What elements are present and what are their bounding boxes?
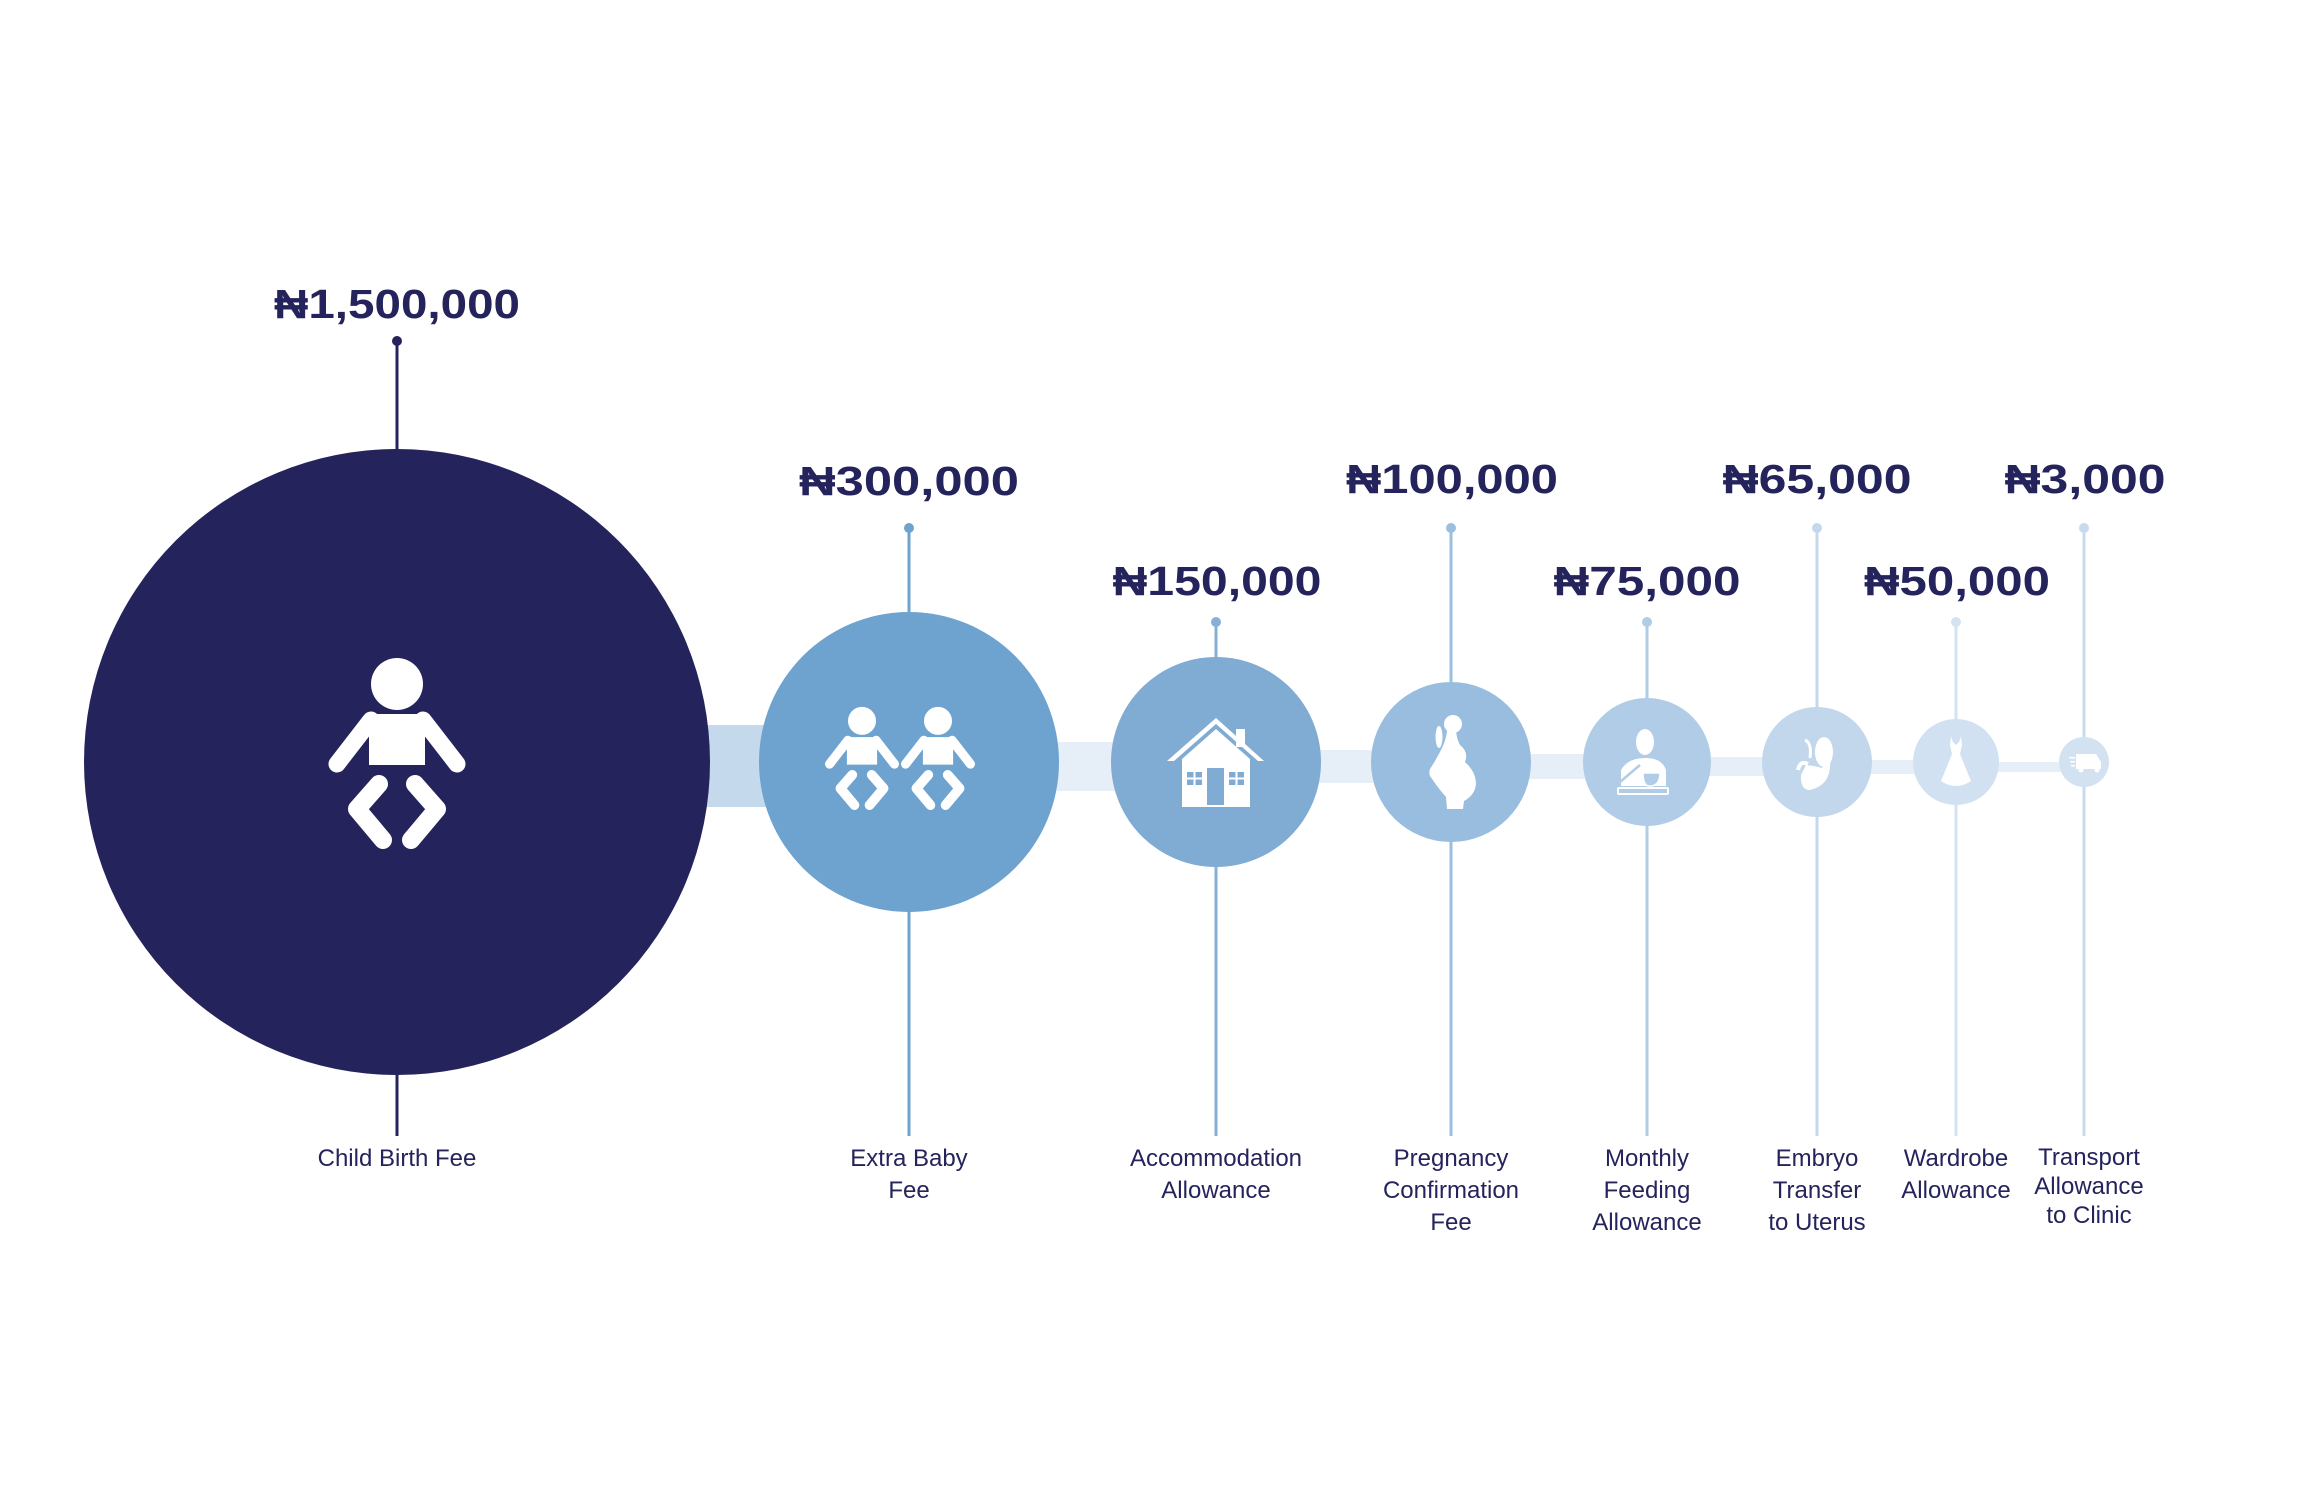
amount: 150,000: ₦150,000: [1112, 558, 1322, 604]
item: Embryo Transfer to Uterus: [1722, 456, 1912, 1236]
amount: 1,500,000: ₦1,500,000: [274, 281, 520, 327]
label: Pregnancy Confirmation Fee: Pregnancy: [1394, 1145, 1508, 1172]
label: Pregnancy Confirmation Fee: Fee: [1430, 1209, 1472, 1236]
item: Extra Baby Fee: [759, 458, 1059, 1204]
label: Embryo Transfer to Uterus: Transfer: [1773, 1177, 1861, 1204]
label: Monthly Feeding Allowance: Allowance: [1592, 1209, 1702, 1236]
label: Monthly Feeding Allowance: Feeding: [1604, 1177, 1690, 1204]
item: Pregnancy Confirmation Fee: [1346, 456, 1558, 1236]
icon: van: [2069, 754, 2101, 772]
label: Child Birth Fee: Child Birth Fee: [318, 1145, 476, 1172]
circle: embryo: [1762, 707, 1872, 817]
label: Transport Allowance to Clinic: to Clinic: [2046, 1202, 2132, 1229]
circle: pregnancy: [1371, 682, 1531, 842]
item: Accommodation Allowance: [1111, 558, 1322, 1204]
label: Wardrobe Allowance: Allowance: [1901, 1177, 2011, 1204]
circle: wardrobe: [1913, 719, 1999, 805]
amount: 50,000: ₦50,000: [1864, 558, 2050, 604]
icon: house: [1167, 718, 1264, 807]
amount: 300,000: ₦300,000: [799, 458, 1019, 504]
label: Accommodation Allowance: Accommodation: [1130, 1145, 1302, 1172]
item: Transport Allowance to Clinic: [2004, 456, 2166, 1229]
label: Accommodation Allowance: Allowance: [1161, 1177, 1271, 1204]
connector bands: [700, 725, 2070, 807]
item: Wardrobe Allowance: [1864, 558, 2050, 1204]
item: Monthly Feeding Allowance: [1554, 558, 1740, 1236]
label: Pregnancy Confirmation Fee: Confirmation: [1383, 1177, 1519, 1204]
icon: dress: [1941, 737, 1971, 786]
label: Transport Allowance to Clinic: Transport: [2038, 1144, 2140, 1171]
icon: baby: [337, 658, 457, 840]
circle: feeding: [1583, 698, 1711, 826]
label: Transport Allowance to Clinic: Allowance: [2034, 1173, 2144, 1200]
label: Embryo Transfer to Uterus: to Uterus: [1768, 1209, 1866, 1236]
amount: 100,000: ₦100,000: [1346, 456, 1558, 502]
circle: accommodation: [1111, 657, 1321, 867]
icon: twin babies: [830, 707, 970, 805]
amount: 3,000: ₦3,000: [2004, 456, 2166, 502]
icon: feeding: [1617, 729, 1669, 795]
label: Monthly Feeding Allowance: Monthly: [1605, 1145, 1689, 1172]
icon: embryo: [1798, 737, 1833, 790]
circle: extra baby: [759, 612, 1059, 912]
amount: 75,000: ₦75,000: [1554, 558, 1740, 604]
amount: 65,000: ₦65,000: [1722, 456, 1912, 502]
label: Extra Baby Fee: Fee: [888, 1177, 930, 1204]
circle: transport: [2059, 737, 2109, 787]
label: Embryo Transfer to Uterus: Embryo: [1776, 1145, 1858, 1172]
item: Child Birth Fee: [84, 281, 710, 1172]
circle: child birth: [84, 449, 710, 1075]
icon: pregnant woman: [1429, 715, 1476, 809]
label: Wardrobe Allowance: Wardrobe: [1904, 1145, 2008, 1172]
label: Extra Baby Fee: Extra Baby: [850, 1145, 968, 1172]
